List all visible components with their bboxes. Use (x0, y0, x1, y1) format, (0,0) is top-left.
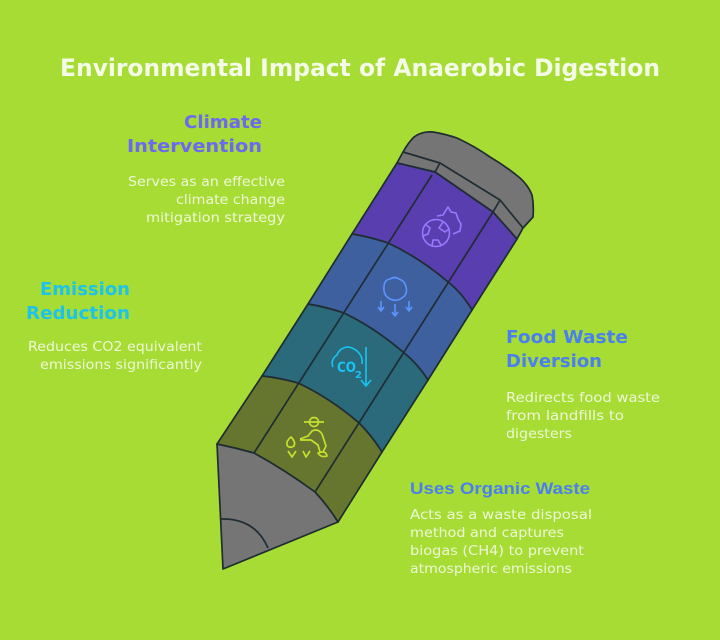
text: uses organic waste: atmospheric emissions (410, 562, 572, 577)
icon: CO2 cloud with arrow: 2 (355, 370, 362, 381)
text: food waste diversion: from landfills to (506, 409, 624, 424)
icon: cloud with down arrows (378, 278, 412, 316)
text: uses organic waste: biogas (CH4) to prevent (410, 544, 584, 559)
text: uses organic waste: Acts as a waste disposal (410, 508, 592, 523)
heading: uses organic waste: Uses Organic Waste (410, 479, 590, 498)
band: emission reduction (308, 234, 472, 380)
text: uses organic waste (410, 508, 592, 577)
text: climate intervention (128, 175, 285, 226)
text: emission reduction: emissions significantly (40, 358, 202, 373)
heading: emission reduction (26, 279, 130, 324)
icon: CO2 cloud with arrow: CO (337, 360, 356, 376)
icon: CO2 cloud with arrow (332, 347, 371, 386)
text: food waste diversion: digesters (506, 427, 572, 442)
icon: farmer with plants (287, 418, 327, 457)
text: emission reduction (28, 340, 202, 373)
text: climate intervention: mitigation strategy (146, 211, 285, 226)
text: climate intervention: climate change (176, 193, 285, 208)
band: CO2 reduction (262, 304, 428, 452)
band: climate intervention (352, 163, 517, 310)
heading: food waste diversion: Diversion (506, 351, 602, 372)
heading: food waste diversion: Food Waste (506, 327, 628, 348)
text: uses organic waste: method and captures (410, 526, 564, 541)
heading: food waste diversion (506, 327, 628, 372)
heading: emission reduction: Emission (40, 279, 130, 300)
heading: climate intervention: Intervention (127, 136, 262, 157)
pencil tip (217, 444, 338, 569)
text: food waste diversion: Redirects food waste (506, 391, 660, 406)
heading: climate intervention: Climate (184, 112, 262, 133)
title: Environmental Impact of Anaerobic Digestion (60, 54, 660, 82)
band: organic waste (217, 376, 382, 522)
pencil diagram (217, 132, 533, 569)
pencil eraser cap (397, 132, 533, 239)
heading: climate intervention (127, 112, 262, 157)
text: emission reduction: Reduces CO2 equivalent (28, 340, 202, 355)
heading: emission reduction: Reduction (26, 303, 130, 324)
icon: globe and flame (422, 207, 461, 246)
text: climate intervention: Serves as an effective (128, 175, 285, 190)
text: food waste diversion (506, 391, 660, 442)
